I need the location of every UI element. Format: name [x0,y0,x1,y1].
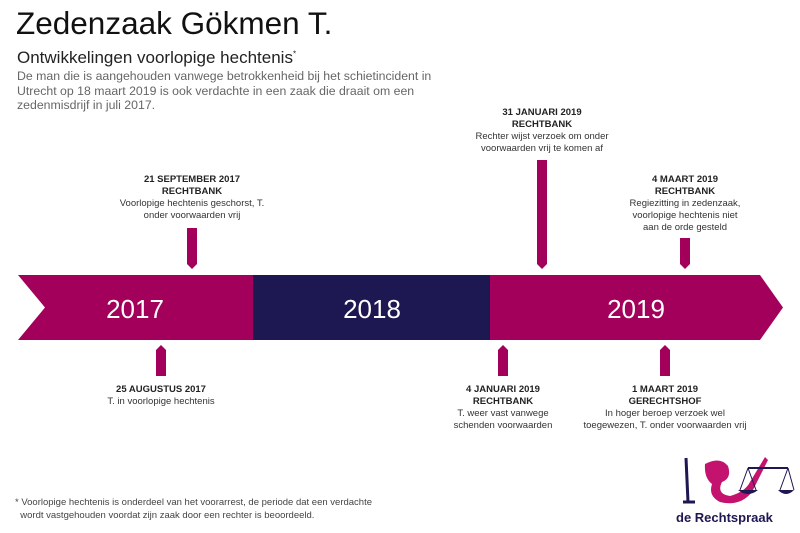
timeline band: 2019 [607,294,665,324]
event: 25 augustus 2017 [107,384,215,407]
event: 4 januari 2019: T. weer vast vanwege [457,408,549,419]
subtitle: Ontwikkelingen voorlopige hechtenis* [17,48,296,67]
event: 1 maart 2019 [583,384,746,431]
event: 1 maart 2019: GERECHTSHOF [629,396,701,407]
event: 31 januari 2019: 31 JANUARI 2019 [502,107,582,118]
timeline band: 2018 [343,294,401,324]
event: 4 januari 2019: 4 JANUARI 2019 [466,384,540,395]
event: 21 september 2017: Voorlopige hechtenis geschorst, T. [120,198,264,209]
event: 4 maart 2019: 4 MAART 2019 [652,174,718,185]
event: 21 september 2017: RECHTBANK [162,186,222,197]
footnote [15,497,372,521]
event: 31 januari 2019: voorwaarden vrij te komen af [481,143,603,154]
logo: de Rechtspraak: de Rechtspraak [676,510,773,525]
event: 31 januari 2019: RECHTBANK [512,119,572,130]
event: 4 maart 2019 [630,174,740,233]
timeline band: 2017 [106,294,164,324]
event: 1 maart 2019: toegewezen, T. onder voorwaarden vrij [583,420,746,431]
event: 21 september 2017: 21 SEPTEMBER 2017 [144,174,240,185]
intro text: De man die is aangehouden vanwege betrokkenheid bij het schietincident in Utrecht op 18 maart 2019 is ook verdachte in een zaak die draait om een zedenmisdrijf in juli 2017. [17,69,431,112]
event: 4 maart 2019: aan de orde gesteld [643,222,727,233]
event: 4 januari 2019 [454,384,552,431]
title: Zedenzaak Gökmen T. [16,5,332,41]
event: 1 maart 2019: In hoger beroep verzoek wel [605,408,725,419]
event: 21 september 2017: onder voorwaarden vrij [144,210,240,221]
event: 31 januari 2019: Rechter wijst verzoek om onder [475,131,609,142]
event: 4 januari 2019: schenden voorwaarden [454,420,552,431]
footnote: wordt vastgehouden voordat zijn zaak door een rechter is beoordeeld. [20,510,314,521]
event: 4 januari 2019: RECHTBANK [473,396,533,407]
event: 4 maart 2019: voorlopige hechtenis niet [632,210,738,221]
event: 1 maart 2019: 1 MAART 2019 [632,384,698,395]
logo: de Rechtspraak [676,457,794,525]
event: 31 januari 2019 [475,107,609,154]
event: 25 augustus 2017: T. in voorlopige hechtenis [107,396,215,407]
event: 25 augustus 2017: 25 AUGUSTUS 2017 [116,384,206,395]
event: 4 maart 2019: Regiezitting in zedenzaak, [630,198,740,209]
event: 21 september 2017 [120,174,264,221]
footnote: * Voorlopige hechtenis is onderdeel van het voorarrest, de periode dat een verdachte [15,497,372,508]
event: 4 maart 2019: RECHTBANK [655,186,715,197]
